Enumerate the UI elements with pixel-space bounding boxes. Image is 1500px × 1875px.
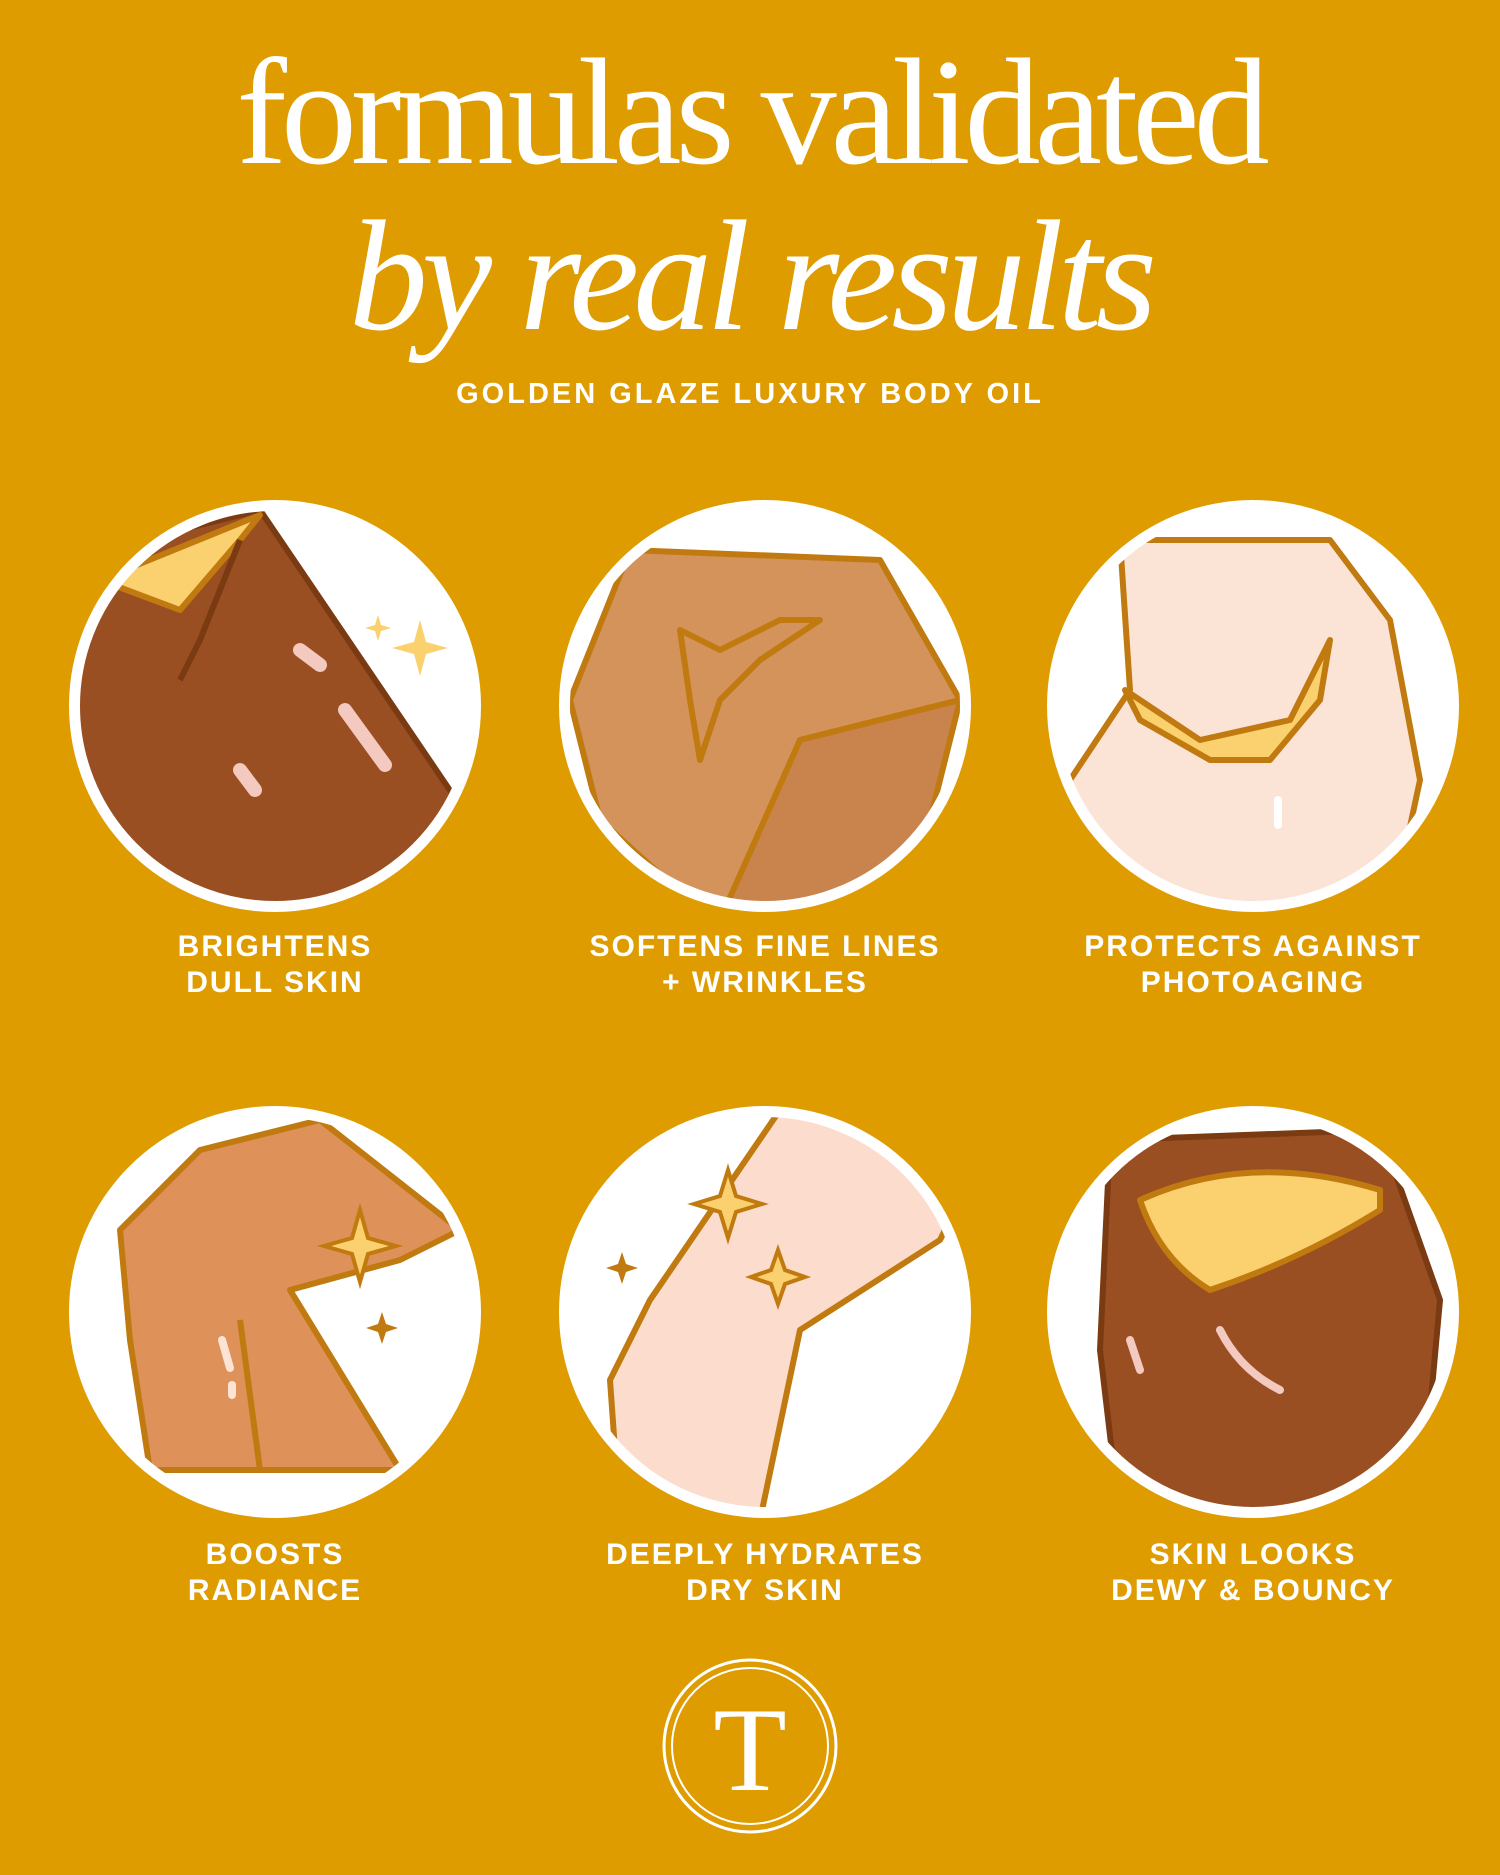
icon: protects [1047, 500, 1459, 920]
label: protects: PROTECTS AGAINST [1084, 930, 1422, 963]
icon: brightens [69, 500, 481, 912]
label: hydrates [606, 1538, 924, 1607]
label: hydrates: DEEPLY HYDRATES [606, 1538, 924, 1571]
label: brightens [178, 930, 372, 999]
icon: hydrates [559, 1106, 980, 1520]
label: brightens: BRIGHTENS [178, 930, 372, 963]
label: softens [589, 930, 941, 999]
label: brightens: DULL SKIN [186, 966, 364, 999]
icon: radiance [69, 1106, 481, 1518]
illustrations [69, 500, 1459, 1834]
label: radiance [188, 1538, 362, 1607]
label: radiance: RADIANCE [188, 1574, 362, 1607]
logo: T [713, 1683, 787, 1816]
label: radiance: BOOSTS [206, 1538, 344, 1571]
label: dewy: SKIN LOOKS [1150, 1538, 1356, 1571]
title: by real results [349, 189, 1151, 364]
title: formulas validated [236, 28, 1264, 196]
icon: dewy [1047, 1106, 1459, 1520]
title [236, 28, 1268, 364]
label: softens: + WRINKLES [662, 966, 868, 999]
label: dewy: DEWY & BOUNCY [1111, 1574, 1395, 1607]
label: softens: SOFTENS FINE LINES [589, 930, 941, 963]
label: hydrates: DRY SKIN [686, 1574, 844, 1607]
label: protects [1084, 930, 1422, 999]
subtitle: GOLDEN GLAZE LUXURY BODY OIL [456, 378, 1044, 410]
label: protects: PHOTOAGING [1141, 966, 1365, 999]
label: dewy [1111, 1538, 1395, 1607]
logo [664, 1660, 836, 1832]
icon: softens [559, 500, 971, 920]
